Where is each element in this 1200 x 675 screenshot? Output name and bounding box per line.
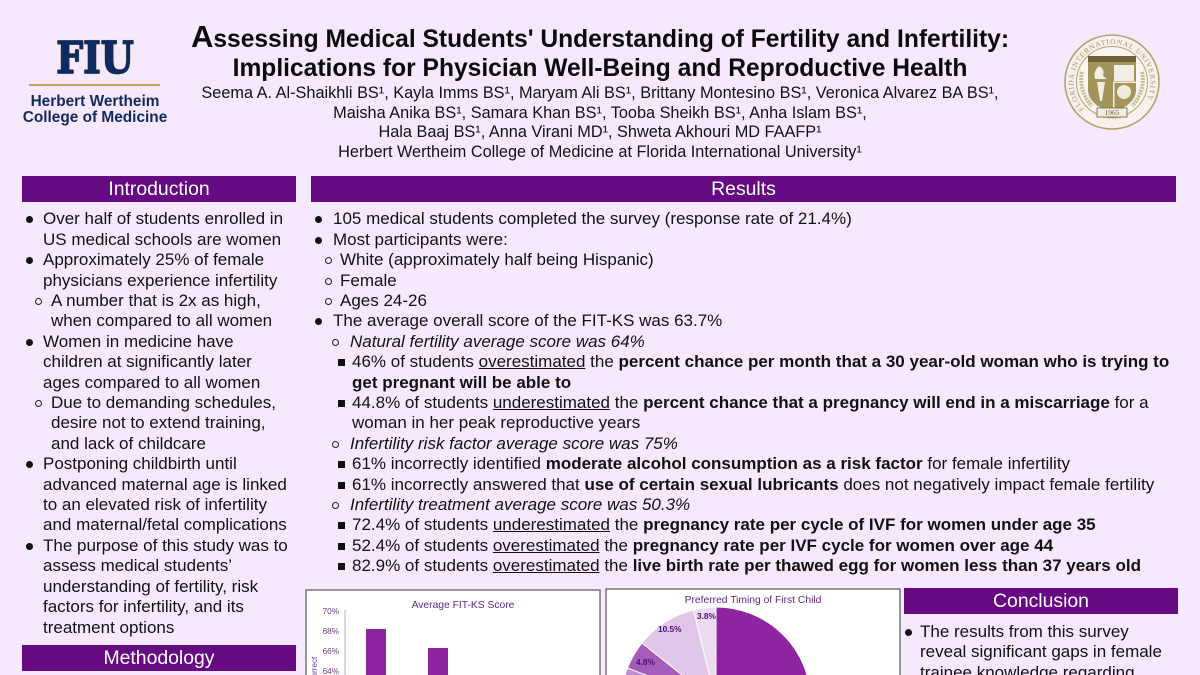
icon: university seal: 1965 (1104, 108, 1120, 117)
panel: introduction text: The purpose of this study was to (43, 536, 288, 554)
logo: FIU Herbert Wertheim College of Medicine: FIU (56, 33, 134, 84)
panel: introduction text: factors for infertility, and its (43, 596, 244, 616)
panel: conclusion text: The results from this survey (920, 622, 1129, 640)
logo: FIU Herbert Wertheim College of Medicine: College of Medicine (23, 109, 167, 126)
panel: introduction text: Over half of students enrolled in (43, 208, 283, 228)
panel: conclusion text: reveal significant gaps in female (920, 642, 1162, 660)
panel: introduction text: and maternal/fetal complications (43, 514, 287, 534)
panel: results text: 72.4% of students underestimated the pregnancy rate per cycle of IVF for women under age 35 (352, 514, 1096, 534)
panel: results text: Infertility risk factor average score was 75% (350, 434, 678, 452)
panel: introduction text: Postponing childbirth until (43, 454, 237, 472)
panel: results text: Most participants were: (333, 230, 508, 248)
title: Implications for Physician Well-Being and Reproductive Health (233, 55, 967, 82)
panel: results text: 61% incorrectly identified moderate alcohol consumption as a risk factor for female infertility (352, 454, 1070, 472)
bar chart: Average FIT-KS Score: 70% (323, 607, 339, 616)
panel: results text: 44.8% of students underestimated the percent chance that a pregnancy will end in a miscarriage for a (352, 392, 1149, 412)
panel: results text: Female (340, 270, 397, 290)
pie chart: Preferred Timing of First Child: 4.8% (636, 657, 656, 667)
heading: Conclusion (904, 588, 1178, 614)
heading: Introduction (22, 176, 296, 202)
panel: introduction text: assess medical students’ (43, 556, 232, 574)
bar chart: Average FIT-KS Score: Average FIT-KS Score (412, 600, 515, 611)
title (191, 19, 1009, 82)
title: Assessing Medical Students' Understanding of Fertility and Infertility: (191, 19, 1009, 54)
panel: results text: 46% of students overestimated the percent chance per month that a 30 year-old woman who is trying to (352, 352, 1169, 370)
panel: results text: woman in her peak reproductive years (352, 412, 640, 432)
heading: Results (311, 176, 1176, 202)
pie chart: Preferred Timing of First Child (605, 588, 901, 675)
pie chart: Preferred Timing of First Child: 10.5% (658, 624, 682, 634)
heading: Methodology (22, 645, 296, 671)
panel: results text: 52.4% of students overestimated the pregnancy rate per IVF cycle for women over age 44 (352, 536, 1053, 554)
panel: results text: Natural fertility average score was 64% (350, 332, 645, 350)
panel: introduction text: advanced maternal age is linked (43, 474, 287, 494)
panel: results text: 82.9% of students overestimated the live birth rate per thawed egg for women less than 37 years old (352, 556, 1141, 574)
panel: results text: The average overall score of the FIT-KS was 63.7% (333, 310, 722, 330)
panel: results text: Infertility treatment average score was 50.3% (350, 494, 690, 514)
panel: introduction text: US medical schools are women (43, 230, 281, 248)
authors and affiliation: Hala Baaj BS¹, Anna Virani MD¹, Shweta Akhouri MD FAAFP¹ (378, 123, 822, 141)
panel: introduction text: treatment options (43, 618, 174, 636)
panel: results text: Ages 24-26 (340, 290, 427, 310)
heading: Results: Results (711, 178, 776, 200)
panel: introduction text: when compared to all women (51, 310, 272, 330)
heading: Conclusion: Conclusion (993, 590, 1089, 612)
panel: introduction text: desire not to extend training, (51, 412, 266, 432)
panel: results text: 61% incorrectly answered that use of certain sexual lubricants does not negatively impact female fertility (352, 474, 1154, 494)
icon: university seal: FLORIDA INTERNATIONAL UNIVERSITY (1068, 39, 1156, 112)
panel: results text: 105 medical students completed the survey (response rate of 21.4%) (333, 208, 852, 228)
pie chart: Preferred Timing of First Child: 3.8% (697, 611, 717, 621)
panel: introduction text: children at significantly later (43, 352, 252, 370)
icon: university seal: · MIAMI · (1095, 112, 1128, 119)
bar chart: Average FIT-KS Score: 66% (323, 647, 339, 656)
logo: FIU Herbert Wertheim College of Medicine (23, 33, 167, 126)
pie chart: Preferred Timing of First Child: Preferred Timing of First Child (685, 595, 822, 606)
panel: introduction text: ages compared to all women (43, 372, 260, 392)
authors and affiliation: Seema A. Al-Shaikhli BS¹, Kayla Imms BS¹, Maryam Ali BS¹, Brittany Montesino BS¹, Veronica Alvarez BA BS¹, (201, 84, 999, 102)
heading: Methodology: Methodology (103, 647, 215, 669)
panel: introduction text: Approximately 25% of female (43, 250, 264, 268)
panel: introduction text: understanding of fertility, risk (43, 576, 258, 596)
authors and affiliation (201, 84, 999, 161)
authors and affiliation: Maisha Anika BS¹, Samara Khan BS¹, Tooba Sheikh BS¹, Anha Islam BS¹, (333, 104, 867, 122)
panel: conclusion text (905, 622, 1162, 675)
panel: introduction text (26, 208, 288, 636)
bar chart: Average FIT-KS Score (305, 589, 601, 675)
authors and affiliation: Herbert Wertheim College of Medicine at Florida International University¹ (338, 143, 862, 161)
panel: introduction text: Due to demanding schedules, (51, 392, 276, 412)
panel: introduction text: Women in medicine have (43, 332, 234, 350)
panel: introduction text: physicians experience infertility (43, 270, 277, 290)
heading: Introduction: Introduction (108, 178, 210, 200)
panel: introduction text: to an elevated risk of infertility (43, 494, 267, 514)
panel: results text (315, 208, 1169, 574)
panel: results text: White (approximately half being Hispanic) (340, 250, 654, 268)
bar chart: Average FIT-KS Score: 68% (323, 627, 339, 636)
panel: introduction text: and lack of childcare (51, 434, 206, 452)
panel: introduction text: A number that is 2x as high, (51, 290, 261, 310)
logo: FIU Herbert Wertheim College of Medicine: Herbert Wertheim (31, 93, 159, 110)
panel: results text: get pregnant will be able to (352, 372, 571, 392)
